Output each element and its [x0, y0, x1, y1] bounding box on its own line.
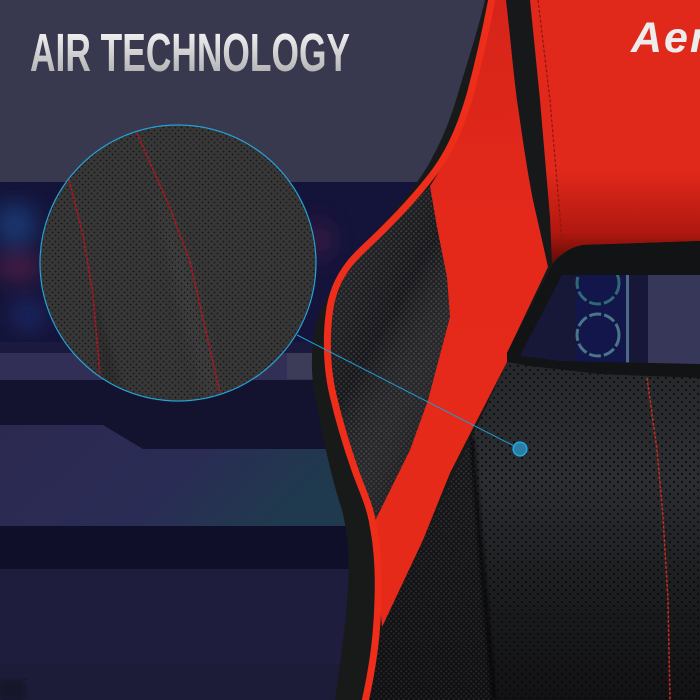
red stitch line [647, 378, 670, 700]
red stitching [69, 180, 100, 375]
carbon fibre side panel, lower [370, 437, 497, 700]
opening showing PC case behind chair [520, 275, 700, 364]
padded frame around headrest opening [507, 241, 700, 378]
black strap beside headrest [506, 0, 553, 268]
red centre panel [373, 0, 548, 627]
chair outer black shell [312, 0, 700, 700]
headrest pillow [530, 0, 700, 264]
carbon fibre side panel, upper [329, 185, 450, 532]
magnified leather detail circle [40, 125, 316, 401]
callout leader line [297, 335, 527, 456]
red piping along the wing [327, 0, 492, 700]
title: AIR TECHNOLOGY [30, 23, 350, 83]
seat back cushion [472, 362, 700, 700]
gaming chair [312, 0, 700, 700]
hotspot dot [513, 442, 527, 456]
